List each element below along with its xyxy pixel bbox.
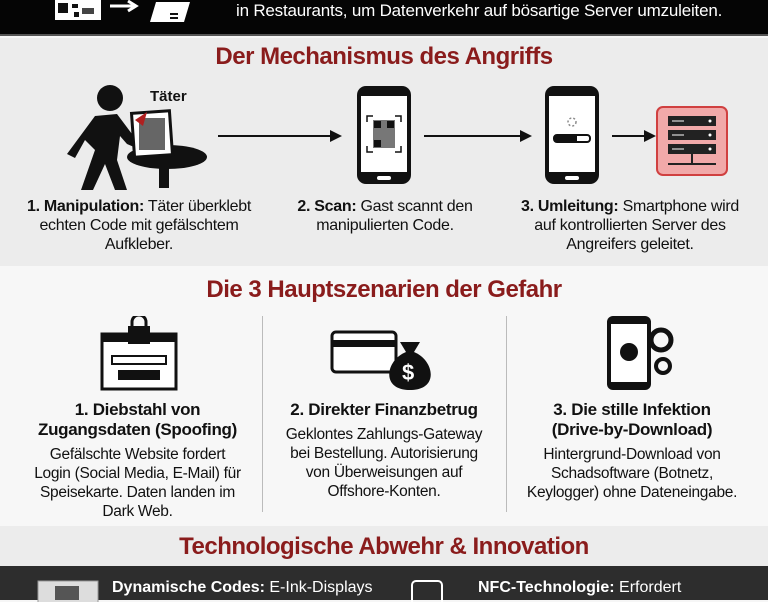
icon: dynamic code — [38, 580, 98, 602]
scenario 2: Offshore-Konten. — [328, 483, 440, 500]
arrows — [218, 130, 656, 142]
banner text: in Restaurants, um Datenverkehr auf bösartige Server umzuleiten. — [236, 1, 722, 20]
caption 3: auf kontrollierten Server des — [534, 217, 726, 234]
icon: perpetrator — [67, 85, 207, 190]
scenario 1: Login (Social Media, E-Mail) für — [34, 465, 241, 482]
scenario 3: (Drive-by-Download) — [552, 420, 712, 439]
caption 1 — [27, 198, 252, 253]
scenario 3: Hintergrund-Download von — [543, 446, 721, 463]
caption 2 — [297, 198, 473, 234]
scenario 3: 3. Die stille Infektion — [553, 400, 711, 419]
scenario 1: Zugangsdaten (Spoofing) — [38, 420, 237, 439]
top banner — [0, 0, 768, 36]
scenario 2 — [286, 400, 482, 500]
caption 2: 2. Scan: Gast scannt den — [297, 198, 473, 215]
caption 1: echten Code mit gefälschtem — [39, 217, 239, 234]
icon: qr code and sticker — [55, 0, 190, 22]
panel: scenarios — [0, 266, 768, 526]
text: nfc: NFC-Technologie: Erfordert — [478, 579, 681, 596]
caption 1: Aufkleber. — [105, 236, 173, 253]
icon: infected phone — [607, 316, 674, 390]
icon: card and money bag — [330, 330, 431, 390]
icon: login — [100, 316, 178, 390]
icon: server — [656, 106, 728, 176]
icon: phone loading — [545, 86, 599, 184]
scenario 1 — [34, 400, 241, 520]
panel: defense heading — [0, 526, 768, 566]
scenario 2: bei Bestellung. Autorisierung — [290, 445, 478, 462]
scenario 2: Geklontes Zahlungs-Gateway — [286, 426, 482, 443]
text: dynamic codes: Dynamische Codes: E-Ink-Displays — [112, 579, 373, 596]
scenario 3: Schadsoftware (Botnetz, — [551, 465, 713, 482]
scenario 1: 1. Diebstahl von — [75, 400, 200, 419]
scenario 1: Speisekarte. Daten landen im — [40, 484, 235, 501]
scenario 3 — [527, 400, 737, 501]
panel: mechanism — [0, 38, 768, 266]
scenario 1: Gefälschte Website fordert — [50, 446, 225, 463]
icon: nfc phone — [411, 580, 443, 602]
scenario 2: von Überweisungen auf — [306, 464, 462, 481]
heading: Der Mechanismus des Angriffs — [215, 43, 553, 70]
caption 3 — [521, 198, 739, 253]
panel: defense — [0, 566, 768, 600]
caption 2: manipulierten Code. — [316, 217, 454, 234]
scenario 3: Keylogger) ohne Dateneingabe. — [527, 484, 737, 501]
icon: phone scan — [357, 86, 411, 184]
panel: defense heading: Technologische Abwehr & Innovation — [179, 533, 589, 560]
icon: perpetrator: Täter — [150, 88, 187, 105]
scenario 2: 2. Direkter Finanzbetrug — [290, 400, 478, 419]
scenario 1: Dark Web. — [102, 503, 173, 520]
caption 3: Angreifers geleitet. — [566, 236, 694, 253]
icon: card and money bag: $ — [402, 360, 414, 385]
caption 1: 1. Manipulation: Täter überklebt — [27, 198, 251, 215]
caption 3: 3. Umleitung: Smartphone wird — [521, 198, 739, 215]
heading: Die 3 Hauptszenarien der Gefahr — [206, 276, 562, 303]
